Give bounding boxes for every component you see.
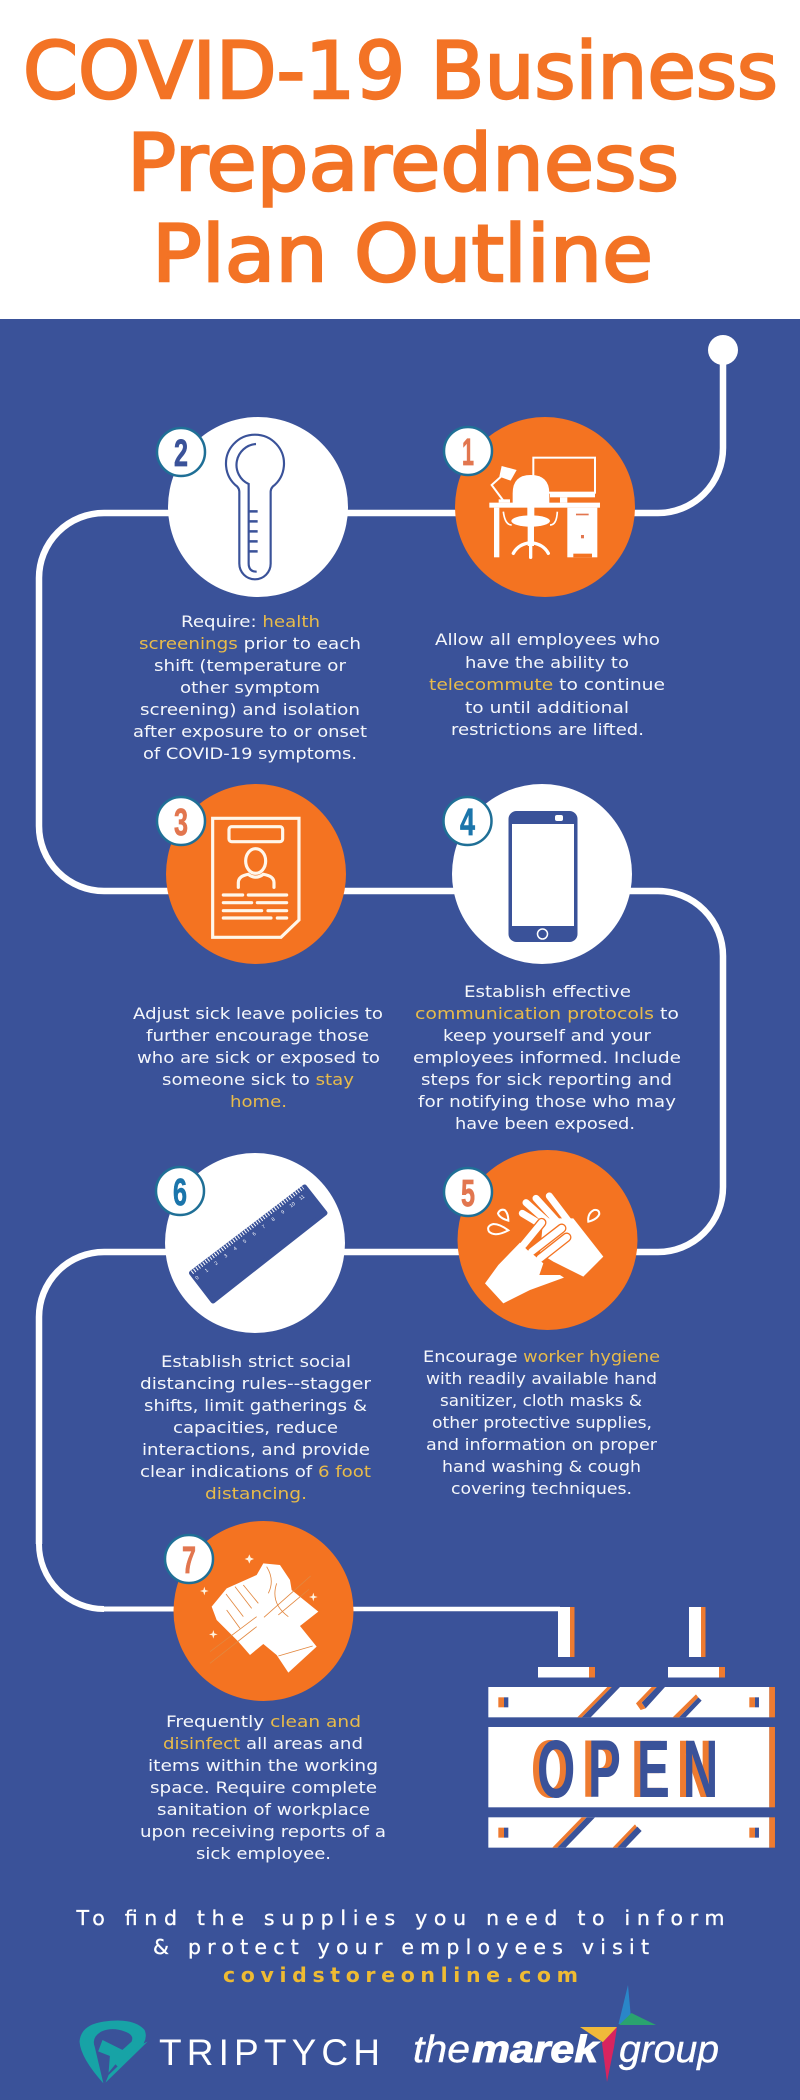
step 7 text: upon receiving reports of a: [140, 1822, 386, 1841]
step 2 text: screening) and isolation: [140, 700, 360, 719]
circle and ruler icon: 4: [233, 1246, 239, 1252]
step 7 text: sanitation of workplace: [157, 1800, 370, 1819]
circle and ruler icon: 10: [289, 1201, 297, 1209]
step 4 text: for notifying those who may: [418, 1092, 676, 1111]
step 1 text: telecommute to continue: [429, 675, 665, 694]
logo: the marek group: [413, 1985, 719, 2082]
step 5 text: and information on proper: [426, 1435, 657, 1454]
step 2 text: screenings prior to each: [139, 634, 361, 653]
sign posts: [538, 1607, 725, 1678]
title: [0, 0, 800, 319]
step 5 text: covering techniques.: [451, 1479, 632, 1498]
step 7 text: disinfect all areas and: [163, 1734, 363, 1753]
step 5 text: [423, 1347, 660, 1498]
number badge 5: [444, 1168, 492, 1216]
circle and ruler icon: 3: [223, 1253, 229, 1260]
step 6 text: Establish strict social: [161, 1352, 351, 1371]
step 6 text: capacities, reduce: [173, 1418, 338, 1437]
circle and desk icon: [455, 417, 635, 597]
step 1 text: [429, 630, 665, 739]
step 7 text: space. Require complete: [150, 1778, 377, 1797]
call to action text: & protect your employees visit: [153, 1935, 649, 1959]
logo: Triptych: [80, 2021, 380, 2083]
title: COVID-19 Business: [23, 27, 778, 117]
title: Preparedness: [127, 119, 679, 209]
circle and cleaning glove icon: [174, 1521, 354, 1701]
step 4 text: employees informed. Include: [413, 1048, 681, 1067]
step 1: telecommute: [429, 417, 665, 739]
step 1 text: to until additional: [465, 698, 629, 717]
circle and ruler icon: 6: [252, 1231, 258, 1238]
step 7 text: items within the working: [148, 1756, 378, 1775]
circle and ruler icon: [165, 1153, 345, 1333]
step 1 text: restrictions are lifted.: [451, 720, 644, 739]
circle and ruler icon: 0: [194, 1275, 200, 1281]
step 7 text: sick employee.: [196, 1844, 331, 1863]
step 3 text: home.: [230, 1092, 287, 1111]
number badge 1: [444, 427, 492, 475]
step 1 text: have the ability to: [465, 653, 629, 672]
circle and thermometer icon: [168, 417, 348, 597]
step 4 text: communication protocols to: [415, 1004, 679, 1023]
step 3 text: who are sick or exposed to: [137, 1048, 380, 1067]
open sign: [488, 1607, 775, 1848]
call to action text: [76, 1906, 724, 1987]
step 6 text: distancing.: [205, 1484, 307, 1503]
step 2 text: [133, 612, 367, 763]
circle and ruler icon: 9: [280, 1209, 286, 1216]
winding timeline path: [39, 335, 738, 1609]
circle and ruler icon: 7: [261, 1224, 267, 1230]
number badge 2: 2: [174, 433, 188, 475]
circle and ruler icon: 1: [204, 1268, 210, 1274]
circle and document icon: [166, 784, 346, 964]
circle and washing hands icon: [458, 1150, 638, 1330]
step 4 text: keep yourself and your: [443, 1026, 651, 1045]
step 3 text: [133, 1004, 383, 1111]
number badge 3: [157, 797, 205, 845]
step 4 text: have been exposed.: [455, 1114, 635, 1133]
circle and ruler icon: 8: [271, 1216, 277, 1223]
step 4 text: steps for sick reporting and: [421, 1070, 672, 1089]
step 2: health screenings: [133, 417, 367, 763]
OPEN lettering: OPEN: [537, 1724, 718, 1815]
step 6 text: [140, 1352, 371, 1503]
step 2 text: of COVID-19 symptoms.: [143, 744, 357, 763]
number badge 6: [156, 1167, 204, 1215]
OPEN lettering: OPEN: [531, 1724, 712, 1815]
circle and ruler icon: 5: [242, 1238, 248, 1245]
step 2 text: shift (temperature or: [154, 656, 346, 675]
logo: the marek group: group: [619, 2029, 719, 2071]
circle and ruler icon: 2: [214, 1260, 220, 1267]
step 6 text: clear indications of 6 foot: [140, 1462, 371, 1481]
step 5 text: with readily available hand: [426, 1369, 657, 1388]
number badge 1: 1: [462, 432, 474, 474]
step 4: communication protocols: [413, 784, 681, 1133]
bottom board: [488, 1817, 775, 1848]
step 7 text: [140, 1712, 386, 1863]
step 5 text: hand washing & cough: [442, 1457, 641, 1476]
circle and ruler icon: 11: [298, 1194, 306, 1202]
number badge 7: [165, 1535, 213, 1583]
step 4 text: Establish effective: [464, 982, 631, 1001]
number badge 7: 7: [182, 1540, 196, 1582]
step 3 text: Adjust sick leave policies to: [133, 1004, 383, 1023]
title: Plan Outline: [152, 210, 653, 300]
step 1 text: Allow all employees who: [435, 630, 660, 649]
middle board: [488, 1727, 775, 1807]
step 6: social distancing: [140, 1153, 371, 1503]
step 5 text: Encourage worker hygiene: [423, 1347, 660, 1366]
step 5: worker hygiene: [423, 1150, 660, 1498]
step 7: clean and disinfect: [140, 1521, 386, 1863]
step 5 text: other protective supplies,: [432, 1413, 652, 1432]
step 2 text: after exposure to or onset: [133, 722, 367, 741]
logo: the marek group: the: [413, 2029, 470, 2071]
step 3 text: someone sick to stay: [162, 1070, 354, 1089]
step 6 text: distancing rules--stagger: [140, 1374, 371, 1393]
number badge 6: 6: [173, 1172, 187, 1214]
step 2 text: other symptom: [180, 678, 320, 697]
step 3: sick leave: [133, 784, 383, 1111]
number badge 4: [444, 797, 492, 845]
step 2 text: Require: health: [181, 612, 320, 631]
call to action text: covidstoreonline.com: [223, 1963, 578, 1987]
call to action text: To find the supplies you need to inform: [76, 1906, 724, 1930]
logo: the marek group: marek: [472, 2029, 600, 2071]
step 6 text: interactions, and provide: [142, 1440, 370, 1459]
number badge 4: 4: [460, 802, 475, 844]
number badge 5: 5: [461, 1173, 475, 1215]
step 6 text: shifts, limit gatherings &: [144, 1396, 367, 1415]
circle and phone icon: [452, 784, 632, 964]
step 7 text: Frequently clean and: [166, 1712, 361, 1731]
top board: [488, 1687, 775, 1717]
number badge 3: 3: [174, 802, 188, 844]
logo: Triptych: TRIPTYCH: [159, 2032, 380, 2073]
step 4 text: [413, 982, 681, 1133]
step 5 text: sanitizer, cloth masks &: [440, 1391, 642, 1410]
step 3 text: further encourage those: [146, 1026, 369, 1045]
number badge 2: [157, 428, 205, 476]
